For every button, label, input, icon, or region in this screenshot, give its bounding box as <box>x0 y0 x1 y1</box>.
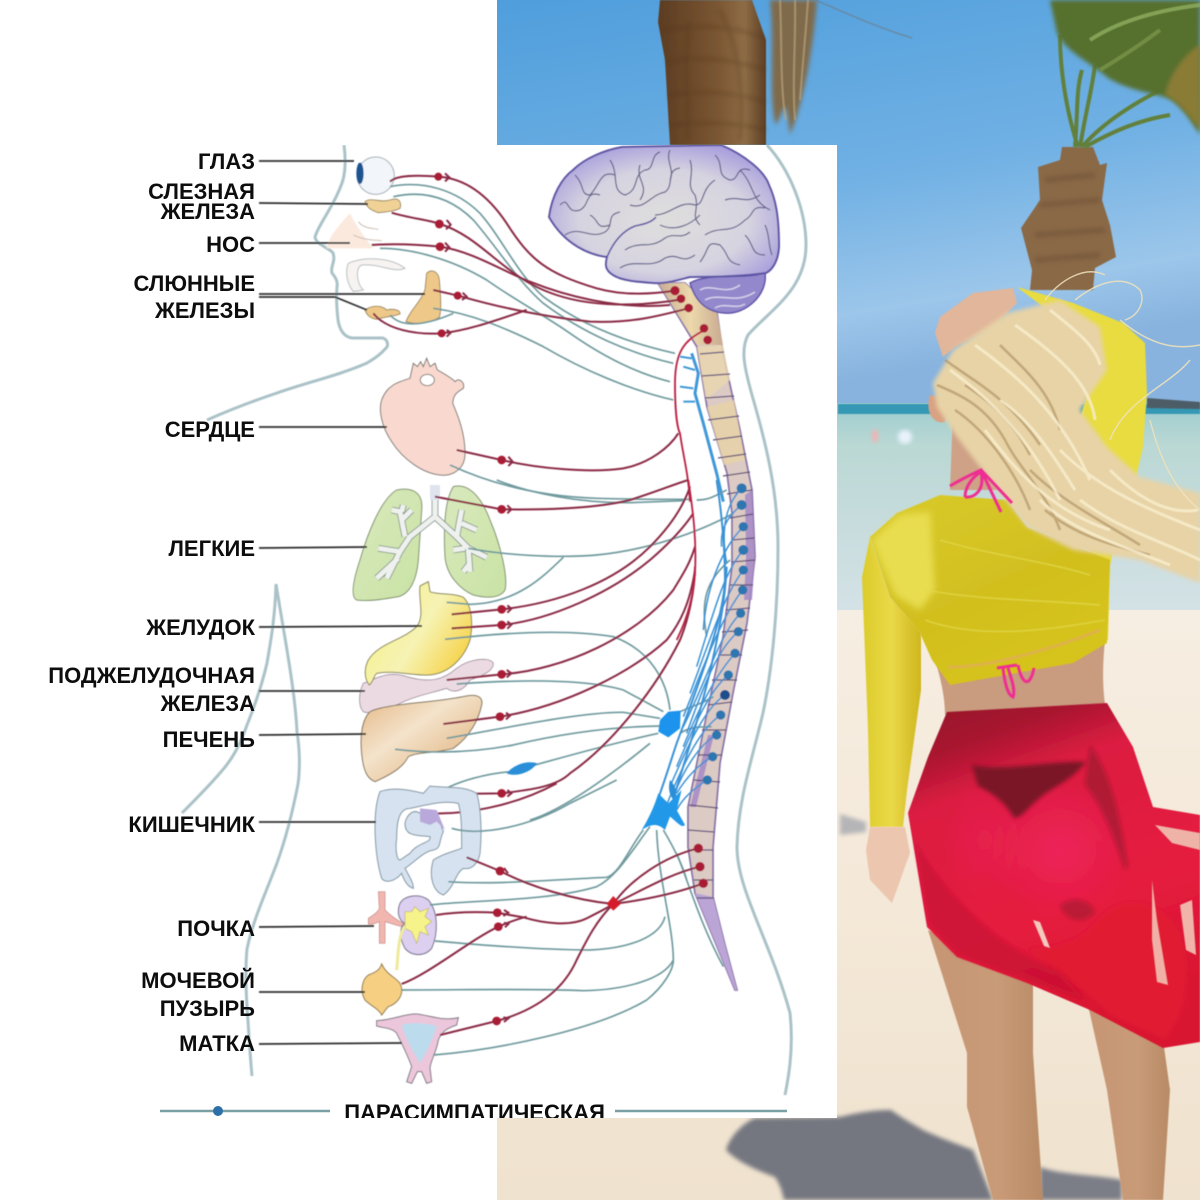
skirt slits <box>1033 825 1200 985</box>
icon: kidney <box>397 896 436 970</box>
label: salivary glands: СЛЮННЫЕ <box>134 271 255 296</box>
legs <box>928 930 1170 1200</box>
horizon band <box>838 404 1200 414</box>
gray-teal nerves <box>395 480 733 820</box>
blue cord dots <box>703 483 748 785</box>
left arm in yellow <box>862 537 921 827</box>
sleeve back part near torso <box>1089 549 1113 640</box>
sympathetic red nerves to head <box>372 173 688 470</box>
raised arm in yellow <box>1017 287 1147 500</box>
organs upper zone <box>327 157 723 502</box>
label: pancreas: ПОДЖЕЛУДОЧНАЯ <box>48 663 255 688</box>
midriff <box>932 640 1105 715</box>
blonde hair <box>933 272 1200 583</box>
ganglion dots head <box>434 173 712 464</box>
hand at skirt <box>866 827 910 903</box>
parasympathetic nerves to head <box>380 185 692 499</box>
neck and ear <box>928 395 1005 490</box>
icon: parotid salivary gland <box>406 271 441 323</box>
spinal cord <box>658 283 755 990</box>
icon: stomach <box>365 582 472 685</box>
icon: uterus <box>377 1014 458 1083</box>
label: eye: ГЛАЗ <box>198 149 255 174</box>
red trunk near cord <box>675 330 705 502</box>
celiac small blue ganglion <box>507 762 537 775</box>
icon: renal artery <box>368 892 403 943</box>
white panel with nervous system diagram <box>0 145 837 1118</box>
label: lungs: ЛЕГКИЕ <box>168 536 255 561</box>
label: uterus: МАТКА <box>179 1031 255 1056</box>
icon: heart <box>380 358 465 475</box>
skirt lace shadow <box>972 745 1128 920</box>
leader lines <box>259 161 425 1044</box>
labels <box>48 149 256 1056</box>
yellow top torso <box>870 495 1110 685</box>
label: bladder line two: ПУЗЫРЬ <box>160 996 255 1021</box>
blue cervical plexus <box>692 353 723 502</box>
icon: bladder <box>362 964 402 1015</box>
organs lower zone <box>362 780 723 1083</box>
photo: beach background with woman <box>497 0 1200 1200</box>
palm trunk left <box>658 0 912 145</box>
buoys in sea <box>872 429 912 444</box>
sky <box>497 0 1200 405</box>
gray nerves lower <box>402 780 723 1055</box>
body outline <box>182 145 806 1095</box>
label: nose: НОС <box>206 232 255 257</box>
icon: lungs <box>353 485 506 601</box>
distant pier <box>1147 398 1200 409</box>
icon: submandibular salivary gland <box>365 306 400 319</box>
label: bladder: МОЧЕВОЙ <box>141 968 255 993</box>
icon: eye <box>356 157 394 194</box>
label: kidney: ПОЧКА <box>177 916 255 941</box>
icon: intestine <box>375 786 481 895</box>
bikini ties <box>950 470 1034 697</box>
label: pancreas line two: ЖЕЛЕЗА <box>160 691 255 716</box>
red ganglia lower <box>492 844 708 1025</box>
label: heart: СЕРДЦЕ <box>165 417 255 442</box>
label: salivary glands line two: ЖЕЛЕЗЫ <box>154 298 255 323</box>
label: lacrimal gland: СЛЕЗНАЯ <box>148 179 255 204</box>
red ganglia middle <box>496 505 506 798</box>
brain <box>549 145 779 313</box>
solar plexus blue ganglion <box>658 711 681 737</box>
label: liver: ПЕЧЕНЬ <box>163 727 255 752</box>
sand <box>497 610 1200 1200</box>
icon: pancreas <box>360 659 493 713</box>
red skirt <box>908 703 1200 1048</box>
icon: liver <box>361 695 482 782</box>
label: intestine: КИШЕЧНИК <box>128 812 256 837</box>
sympathetic red nerves lower <box>402 848 703 1035</box>
legend: parasympathetic: ПАРАСИМПАТИЧЕСКАЯ <box>344 1100 605 1125</box>
blue thoracic nerves <box>650 480 743 820</box>
label: lacrimal gland line two: ЖЕЛЕЗА <box>160 199 255 224</box>
label: stomach: ЖЕЛУДОК <box>145 615 256 640</box>
icon: nose <box>327 213 405 292</box>
icon: lacrimal gland <box>365 199 401 213</box>
sea <box>837 403 1200 610</box>
organs middle zone <box>353 480 748 820</box>
palm tree right <box>1021 0 1200 290</box>
red nerves middle <box>428 480 695 814</box>
legend: parasympathetic <box>160 1100 787 1125</box>
blue pelvic ganglion <box>642 790 685 830</box>
raised hand <box>935 288 1017 357</box>
beach shadow <box>726 814 1122 1200</box>
